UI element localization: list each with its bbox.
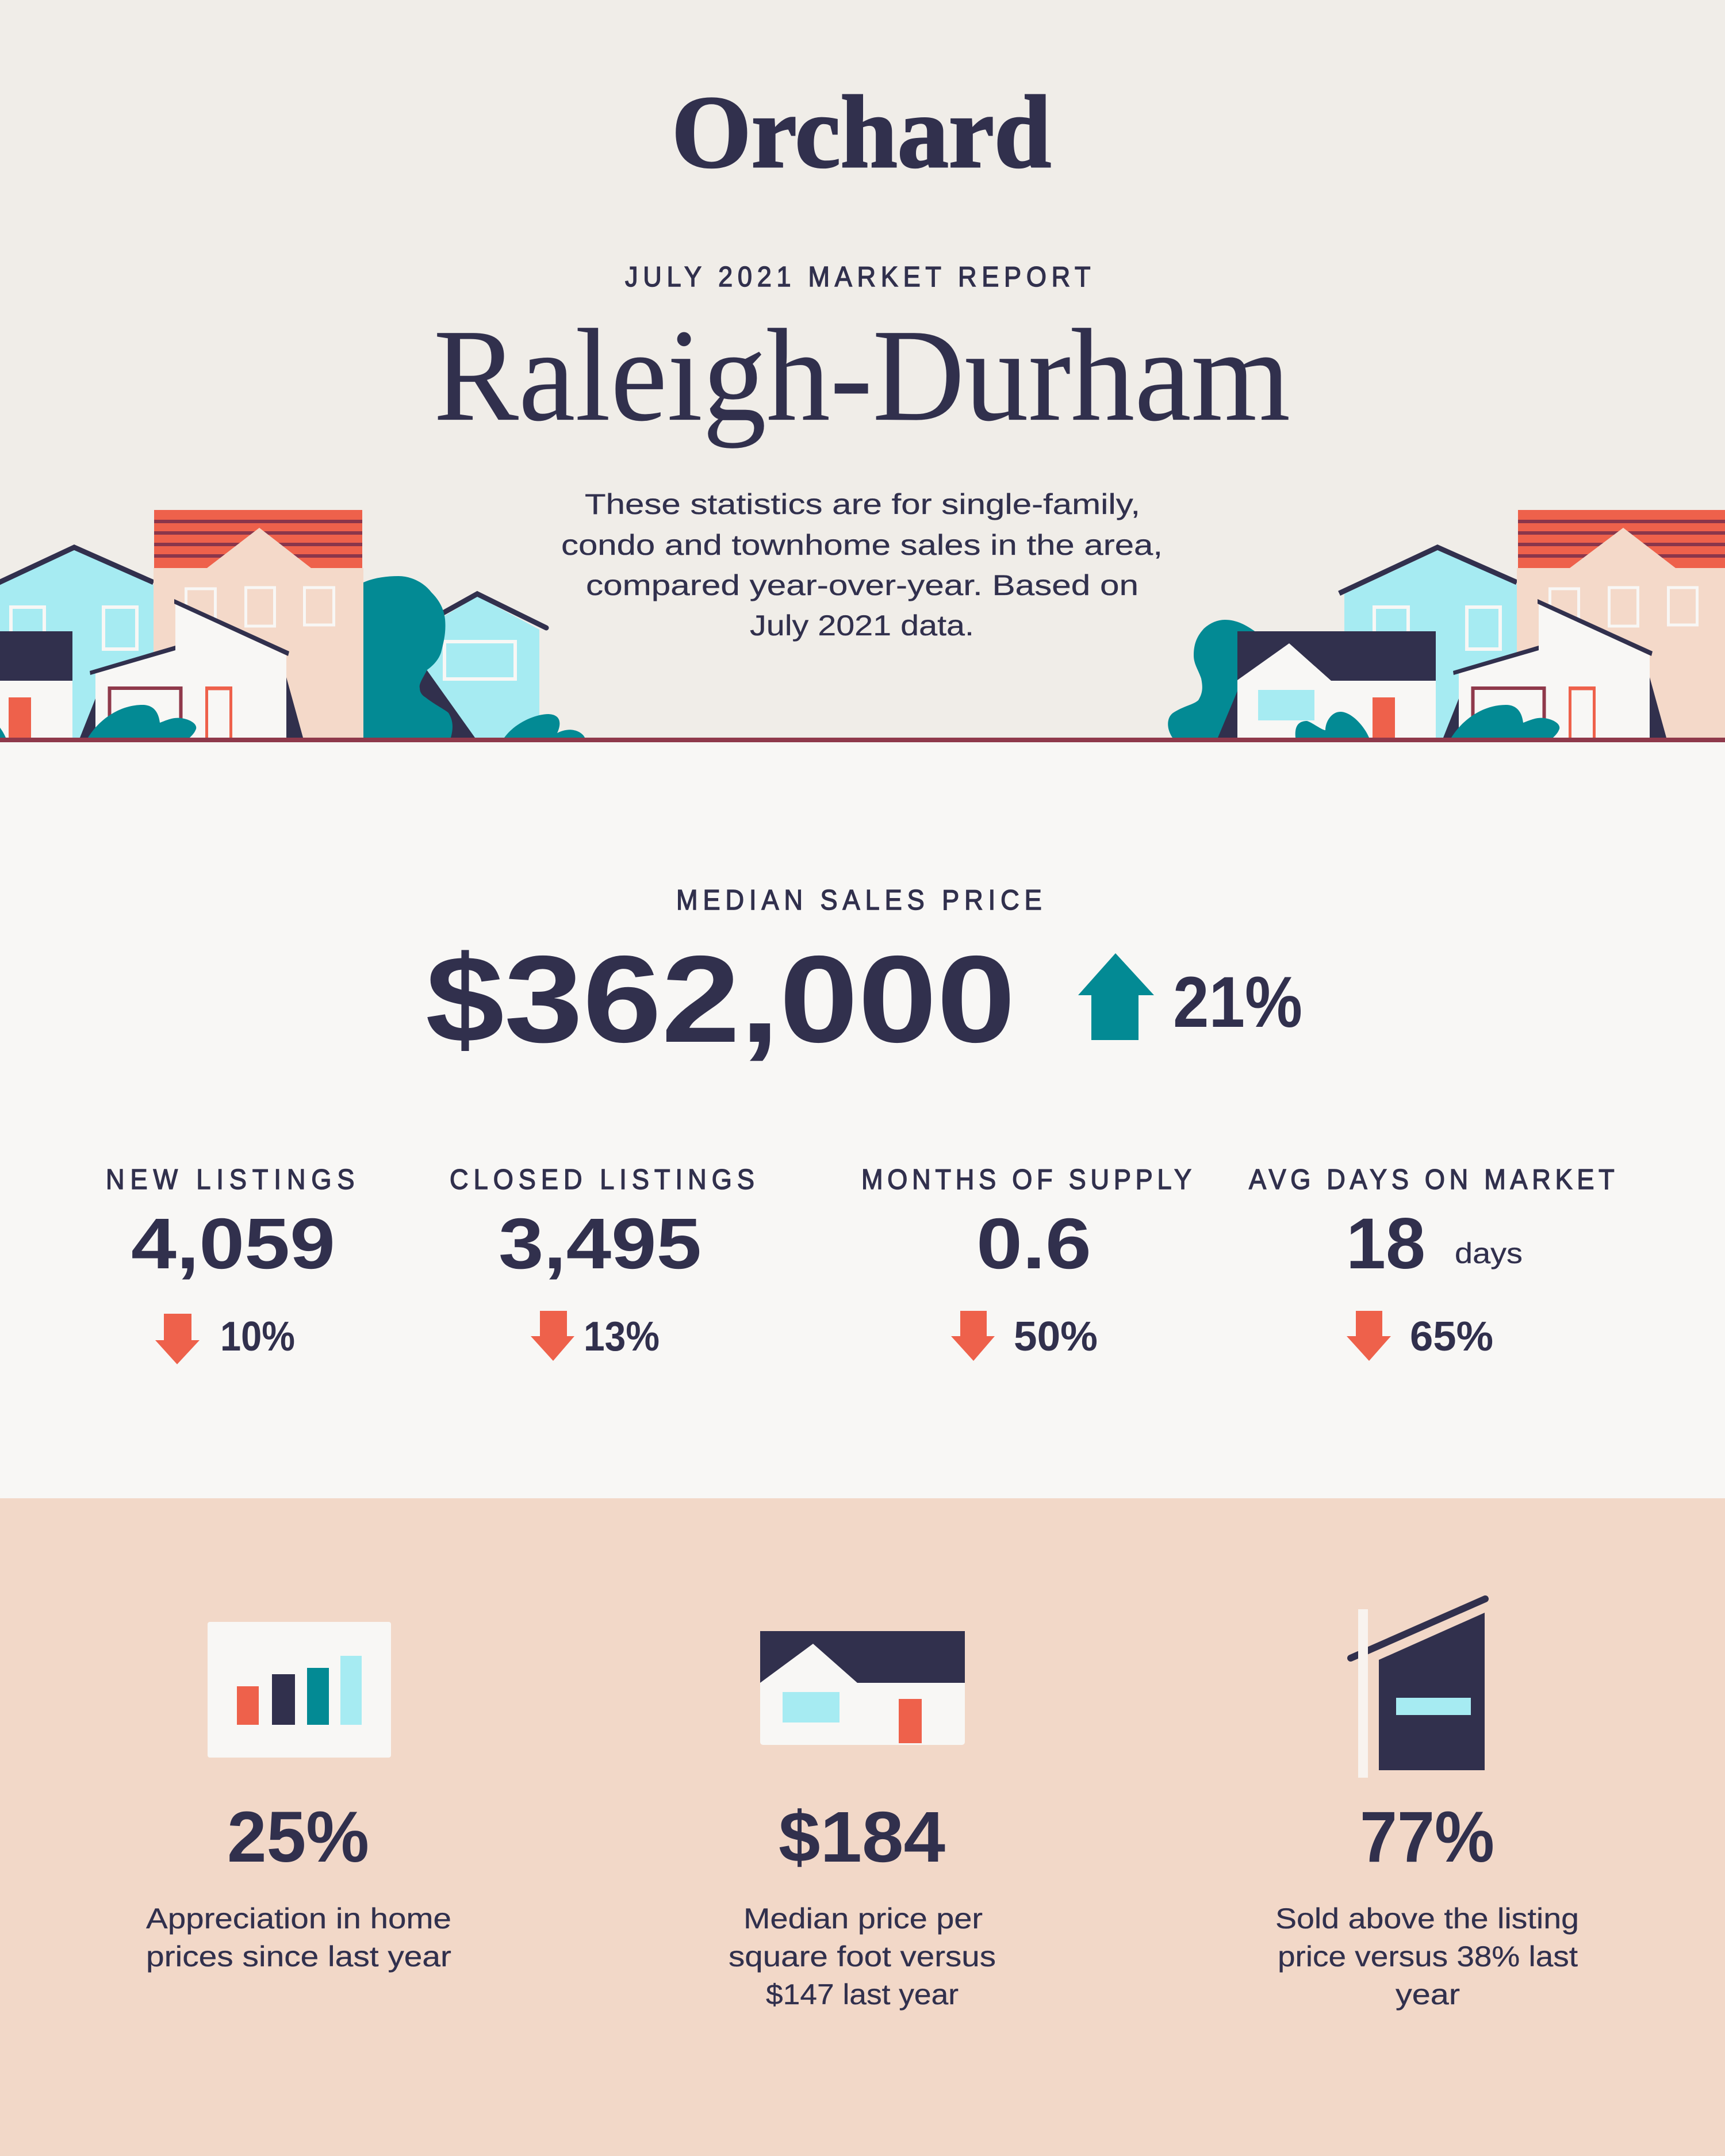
highlight: price per square foot bbox=[729, 1797, 996, 2011]
stat: months of supply: 50% bbox=[1014, 1314, 1098, 1360]
highlight: sold above listing: price versus 38% last bbox=[1278, 1940, 1578, 1973]
blue house with dark roof bbox=[0, 547, 154, 738]
illustration: right neighborhood bbox=[1168, 510, 1725, 738]
intro text: compared year-over-year. Based on bbox=[586, 569, 1138, 601]
ground line bbox=[0, 738, 1725, 742]
intro text: condo and townhome sales in the area, bbox=[561, 529, 1163, 561]
stat: avg days on market: AVG DAYS ON MARKET bbox=[1249, 1163, 1615, 1195]
illustration: left neighborhood bbox=[0, 510, 585, 738]
teal tree behind house bbox=[1168, 620, 1265, 738]
panel: highlights background bbox=[0, 1498, 1725, 2156]
stat: closed listings: 13% bbox=[584, 1314, 660, 1360]
report date heading: JULY 2021 MARKET REPORT bbox=[625, 260, 1091, 292]
highlight: price per square foot: $147 last year bbox=[766, 1978, 959, 2011]
highlight: appreciation: 25% bbox=[227, 1797, 369, 1877]
front house with dark roof, cropped at the edge bbox=[0, 631, 72, 738]
intro text: These statistics are for single-family, bbox=[585, 488, 1140, 520]
highlight: appreciation: Appreciation in home bbox=[146, 1902, 451, 1935]
value: median sales price: $362,000 bbox=[425, 930, 1015, 1068]
panel: header background bbox=[0, 0, 1725, 739]
stat: closed listings: 3,495 bbox=[499, 1204, 702, 1284]
highlight: sold above listing: 77% bbox=[1360, 1797, 1494, 1877]
stat: closed listings bbox=[450, 1163, 754, 1361]
stat: new listings: 4,059 bbox=[131, 1204, 335, 1284]
icon: down arrow bbox=[951, 1311, 995, 1361]
icon: modern house bbox=[1351, 1599, 1485, 1778]
bush bbox=[1451, 705, 1559, 738]
stat: months of supply: MONTHS OF SUPPLY bbox=[861, 1163, 1191, 1195]
peach townhouse with striped roof bbox=[154, 510, 363, 738]
stat: avg days on market: 18 bbox=[1346, 1204, 1425, 1284]
highlight: appreciation: prices since last year bbox=[146, 1940, 451, 1973]
stat: new listings bbox=[106, 1163, 354, 1364]
icon: house bbox=[760, 1631, 965, 1745]
stat: avg days on market: 65% bbox=[1410, 1314, 1493, 1360]
label: median sales price: MEDIAN SALES PRICE bbox=[676, 884, 1042, 915]
white house bbox=[80, 599, 303, 738]
highlight: sold above listing: year bbox=[1396, 1978, 1460, 2011]
highlight: price per square foot: square foot versus bbox=[729, 1940, 996, 1973]
highlight: price per square foot: Median price per bbox=[743, 1902, 983, 1935]
panel: statistics background bbox=[0, 739, 1725, 1498]
blue house with dark roof bbox=[1339, 547, 1517, 738]
intro text bbox=[561, 488, 1163, 642]
stat: months of supply bbox=[861, 1163, 1191, 1361]
white house bbox=[1443, 599, 1666, 738]
stat: new listings: 10% bbox=[220, 1314, 295, 1360]
logo: Orchard: Orchard bbox=[672, 75, 1051, 189]
icon: down arrow bbox=[1347, 1311, 1391, 1361]
icon: bar chart card bbox=[208, 1622, 391, 1758]
front house with dark roof bbox=[1218, 631, 1436, 738]
big teal tree bbox=[363, 576, 453, 738]
stat: new listings: NEW LISTINGS bbox=[106, 1163, 354, 1195]
stat: months of supply: 0.6 bbox=[976, 1204, 1091, 1284]
icon: down arrow bbox=[531, 1311, 574, 1361]
highlight: sold above listing bbox=[1275, 1797, 1579, 2011]
highlight: price per square foot: $184 bbox=[779, 1797, 945, 1877]
title: Raleigh-Durham: Raleigh-Durham bbox=[434, 302, 1290, 448]
icon: up arrow bbox=[1078, 953, 1154, 1040]
highlight: sold above listing: Sold above the listing bbox=[1275, 1902, 1579, 1935]
peach townhouse with striped roof bbox=[1517, 510, 1725, 738]
stat: closed listings: CLOSED LISTINGS bbox=[450, 1163, 754, 1195]
bushes bbox=[88, 705, 585, 738]
change: median price up 21%: 21% bbox=[1173, 962, 1302, 1042]
highlight: appreciation bbox=[146, 1797, 451, 1973]
stat: avg days on market bbox=[1249, 1163, 1615, 1361]
stat: avg days on market: days bbox=[1455, 1237, 1523, 1269]
icon: down arrow bbox=[155, 1314, 200, 1364]
small blue house bbox=[414, 594, 546, 738]
intro text: July 2021 data. bbox=[750, 609, 974, 642]
